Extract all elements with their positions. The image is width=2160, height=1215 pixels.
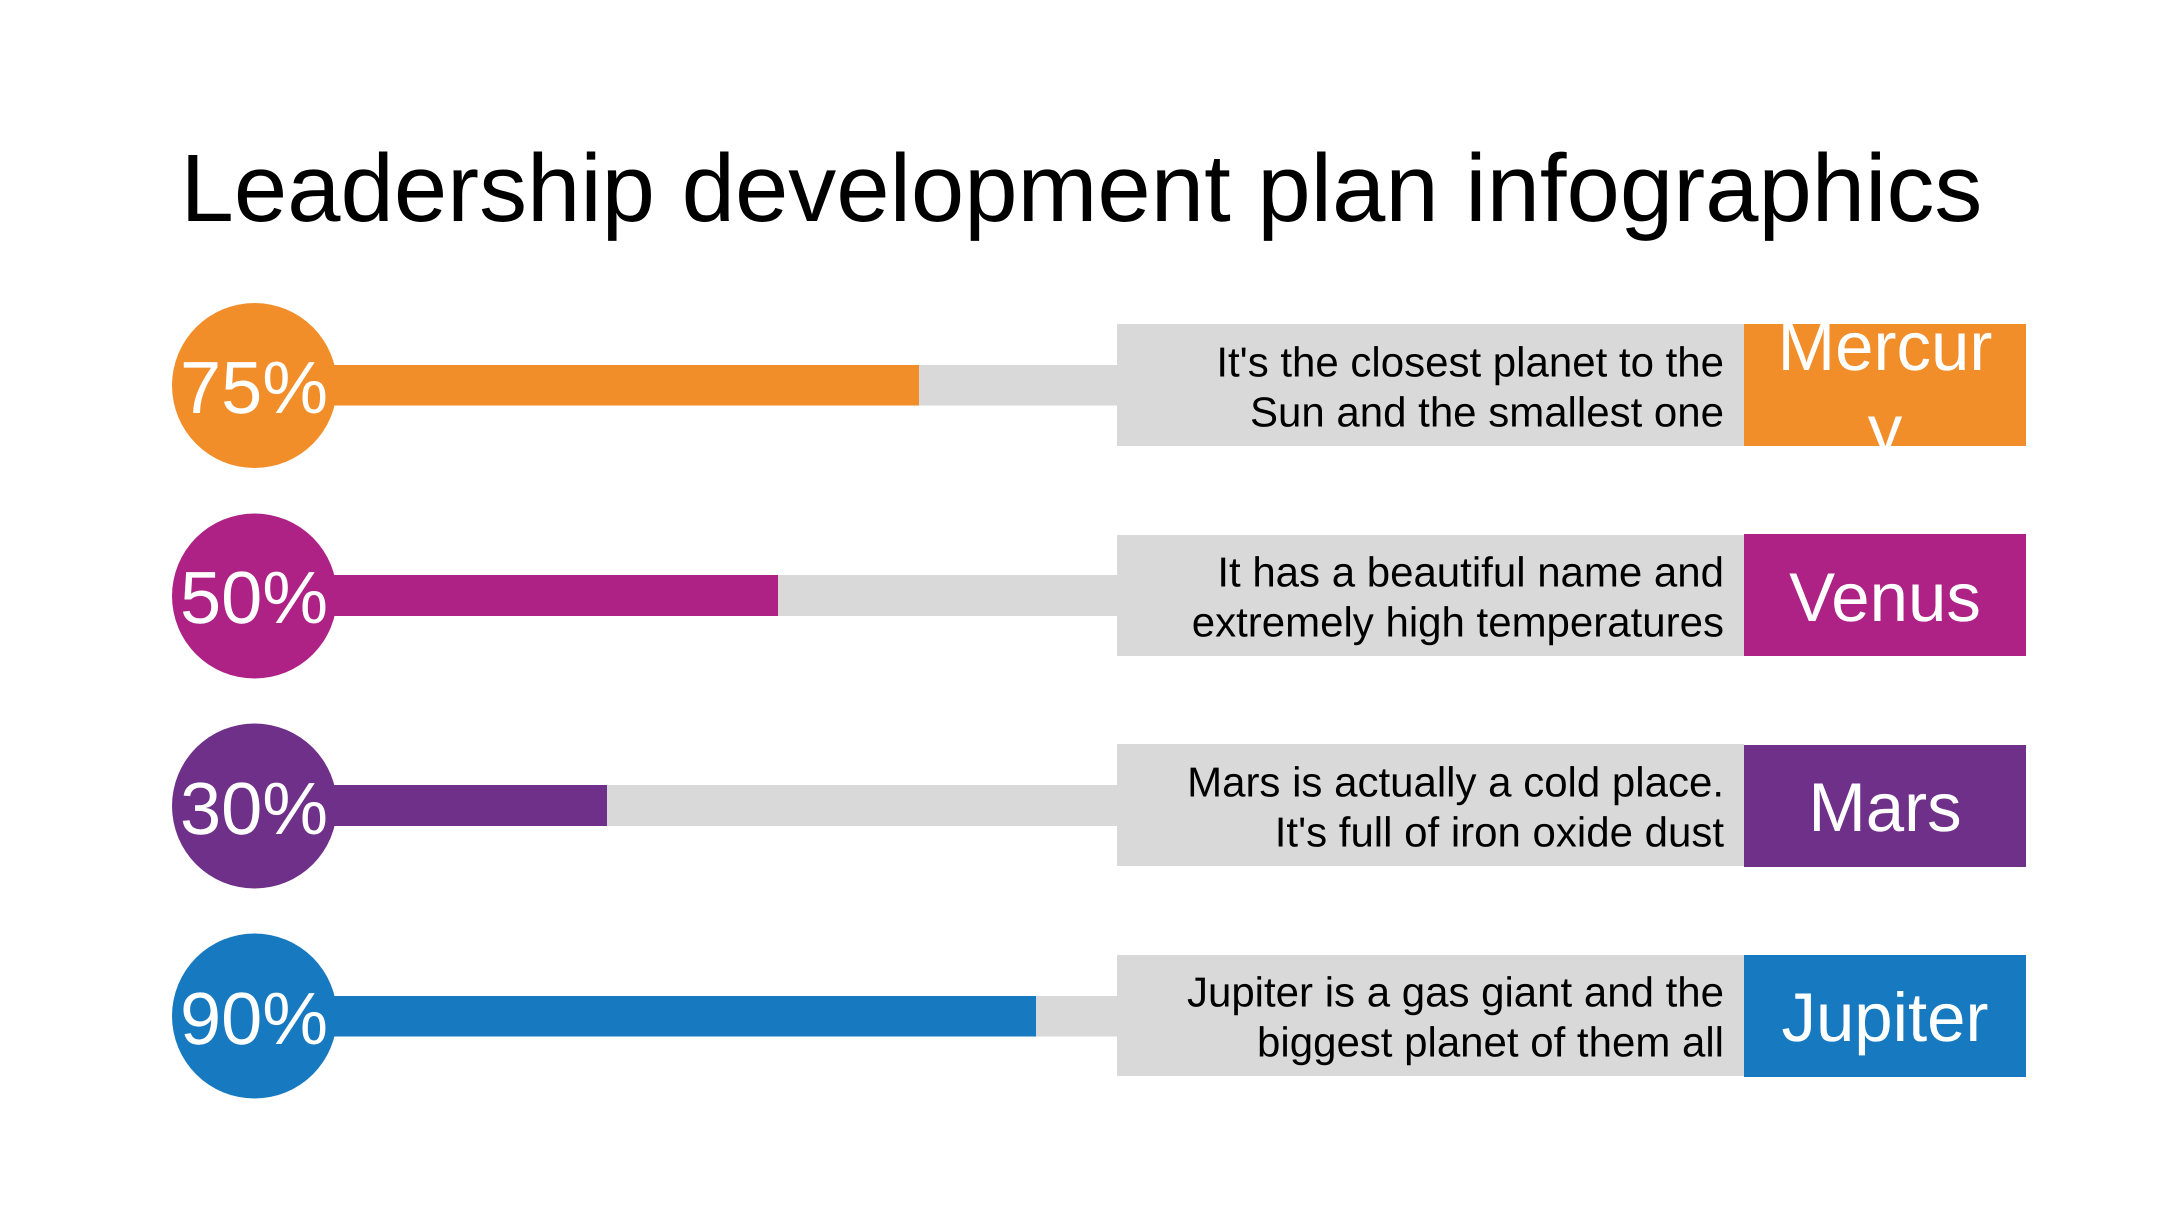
description: Venus	[1117, 535, 1744, 656]
percentage badge: 30%: 30%	[180, 767, 328, 850]
progress bar: Mars 30%	[300, 785, 607, 826]
percentage badge: 30%	[172, 724, 337, 888]
row: Venus	[172, 514, 2026, 678]
description: Venus: It has a beautiful name and	[1217, 548, 1724, 596]
description: Mars: Mars is actually a cold place.	[1187, 758, 1724, 806]
description: Mercury: Sun and the smallest one	[1250, 388, 1724, 436]
progress bar: Mercury 75%	[300, 365, 919, 406]
description: Jupiter: Jupiter is a gas giant and the	[1187, 968, 1724, 1016]
description: Mercury	[1117, 324, 1744, 446]
label: Jupiter: Jupiter	[1781, 979, 1989, 1056]
label: Mercury: y	[1868, 391, 1903, 468]
percentage badge: 90%	[172, 934, 337, 1098]
percentage badge: 90%: 90%	[180, 977, 328, 1060]
progress track: Venus	[300, 575, 1120, 616]
label: Mercury	[1744, 324, 2026, 446]
row: Mars	[172, 724, 2026, 888]
percentage badge: 50%	[172, 514, 337, 678]
progress track: Mars	[300, 785, 1120, 826]
row: Mercury	[172, 303, 2026, 468]
description: Jupiter	[1117, 955, 1744, 1076]
progress track: Mercury	[300, 365, 1120, 406]
label: Venus	[1744, 534, 2026, 656]
description: Mercury: It's the closest planet to the	[1216, 338, 1724, 386]
progress bar: Jupiter 90%	[300, 996, 1036, 1036]
row: Jupiter	[172, 934, 2026, 1098]
progress track: Jupiter	[300, 996, 1120, 1036]
percentage badge: 75%	[172, 303, 337, 468]
description: Jupiter: biggest planet of them all	[1257, 1018, 1724, 1066]
description: Mars	[1117, 744, 1744, 866]
description: Venus: extremely high temperatures	[1192, 598, 1724, 646]
percentage badge: 50%: 50%	[180, 556, 328, 639]
label: Mars	[1744, 745, 2026, 867]
label: Mercury: Mercur	[1778, 308, 1992, 385]
progress bar: Venus 50%	[300, 575, 778, 616]
label: Venus: Venus	[1789, 559, 1981, 636]
percentage badge: 75%: 75%	[180, 346, 328, 429]
label: Jupiter	[1744, 955, 2026, 1077]
label: Mars: Mars	[1808, 769, 1962, 846]
title: Leadership development plan infographics	[180, 135, 1982, 242]
description: Mars: It's full of iron oxide dust	[1275, 808, 1724, 856]
